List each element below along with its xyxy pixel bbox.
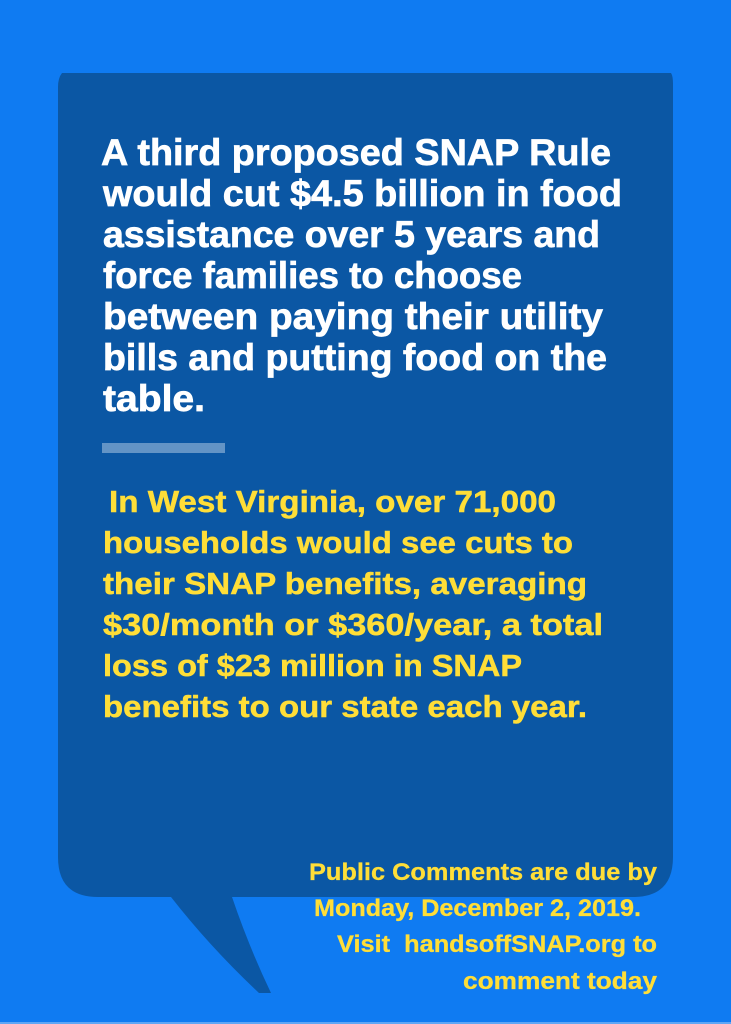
- heading: proposed rule statement: force families to choose: [103, 255, 522, 296]
- heading: proposed rule statement: between paying their utility: [103, 296, 603, 337]
- text block: West Virginia impact: benefits to our state each year.: [103, 689, 587, 724]
- text block: West Virginia impact: households would see cuts to: [103, 525, 573, 560]
- callout: public comment deadline: Monday, December 2, 2019.: [314, 895, 641, 922]
- callout: public comment deadline: Visit handsoffSNAP.org to: [337, 931, 657, 958]
- heading: proposed rule statement: assistance over 5 years and: [103, 214, 600, 255]
- text block: West Virginia impact: In West Virginia, over 71,000: [109, 484, 556, 519]
- text block: West Virginia impact: [103, 484, 603, 724]
- heading: proposed rule statement: A third proposed SNAP Rule: [101, 132, 611, 173]
- text block: West Virginia impact: their SNAP benefits, averaging: [103, 566, 587, 601]
- heading: proposed rule statement: table.: [103, 378, 205, 419]
- text block: West Virginia impact: loss of $23 million in SNAP: [103, 648, 522, 683]
- callout: public comment deadline: comment today: [463, 968, 658, 995]
- callout: public comment deadline: Public Comments are due by: [309, 859, 658, 886]
- divider bar: [102, 443, 225, 453]
- heading: proposed rule statement: bills and putting food on the: [103, 337, 607, 378]
- heading: proposed rule statement: would cut $4.5 billion in food: [102, 173, 622, 214]
- text block: West Virginia impact: $30/month or $360/year, a total: [103, 607, 603, 642]
- heading: proposed rule statement: [101, 132, 622, 419]
- panel: speech bubble: [58, 73, 673, 993]
- callout: public comment deadline: [309, 859, 658, 995]
